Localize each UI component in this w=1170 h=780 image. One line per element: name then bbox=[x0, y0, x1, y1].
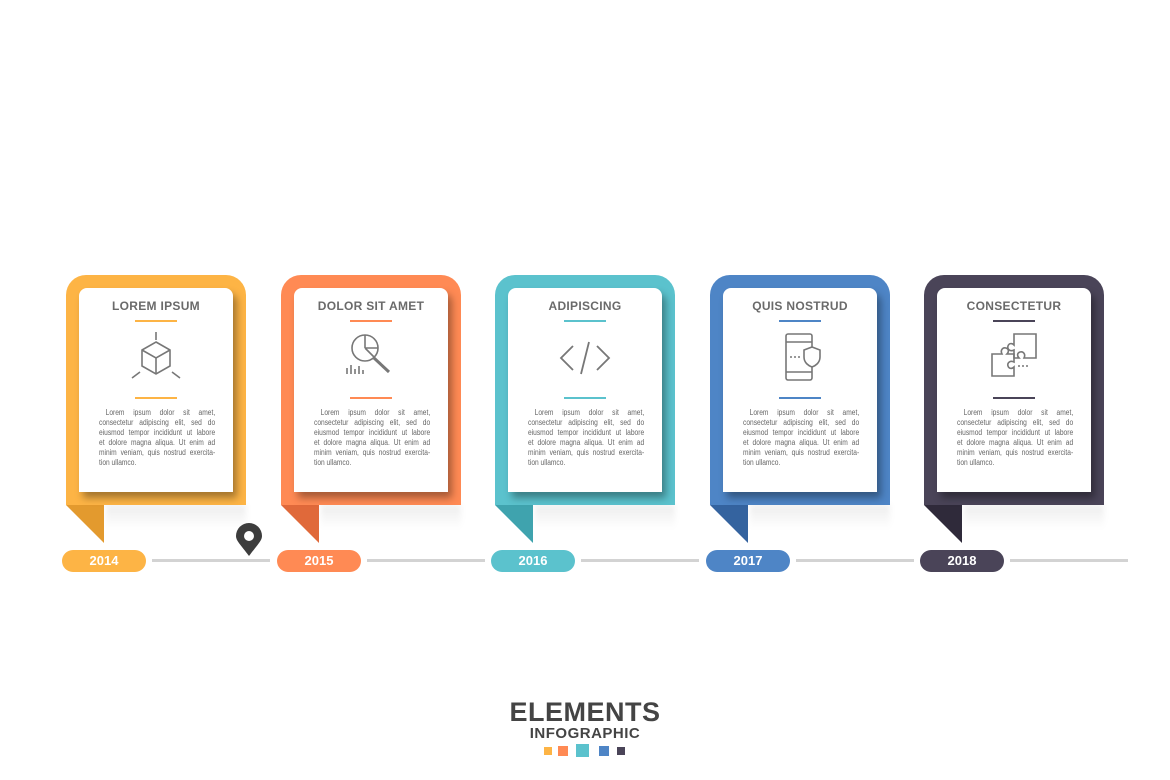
text: consectetur bbox=[99, 418, 133, 427]
text: dolore bbox=[109, 438, 127, 447]
text: minim bbox=[743, 448, 761, 457]
text: adipiscing bbox=[139, 418, 169, 427]
text: et bbox=[957, 438, 963, 447]
text: ipsum bbox=[133, 408, 151, 417]
text: Ut bbox=[394, 438, 400, 447]
text: sit bbox=[1041, 408, 1048, 417]
text: adipiscing bbox=[997, 418, 1027, 427]
text: dolore bbox=[324, 438, 342, 447]
text bbox=[743, 408, 859, 467]
text: ad bbox=[423, 438, 430, 447]
text: elit, bbox=[175, 418, 185, 427]
icon: code bbox=[560, 342, 610, 374]
text: nostrud bbox=[1022, 448, 1044, 457]
text: dolore bbox=[753, 438, 771, 447]
year pills: 2015 bbox=[305, 553, 333, 568]
text: dolor bbox=[589, 408, 603, 417]
text: minim bbox=[99, 448, 117, 457]
text: tion ullamco. bbox=[99, 458, 136, 467]
text: minim bbox=[528, 448, 546, 457]
text: enim bbox=[1047, 438, 1062, 447]
text: ut bbox=[402, 428, 407, 437]
text: incididunt bbox=[798, 428, 826, 437]
text: elit, bbox=[1033, 418, 1043, 427]
text: ut bbox=[1045, 428, 1050, 437]
text bbox=[528, 408, 644, 467]
text: incididunt bbox=[369, 428, 397, 437]
text: adipiscing bbox=[783, 418, 813, 427]
year pills: 2016 bbox=[519, 553, 547, 568]
text: minim bbox=[314, 448, 332, 457]
text: Lorem bbox=[106, 408, 124, 417]
text: labore bbox=[197, 428, 215, 437]
text: enim bbox=[189, 438, 204, 447]
text: consectetur bbox=[743, 418, 777, 427]
text: elit, bbox=[604, 418, 614, 427]
text: Ut bbox=[1037, 438, 1043, 447]
text: nostrud bbox=[808, 448, 830, 457]
text: eiusmod bbox=[99, 428, 124, 437]
text: ipsum bbox=[991, 408, 1009, 417]
text: sed bbox=[191, 418, 202, 427]
text: exercita- bbox=[190, 448, 215, 457]
year pills: 2014 bbox=[90, 553, 118, 568]
title: LOREM IPSUM bbox=[112, 299, 200, 313]
title: ADIPISCING bbox=[548, 299, 622, 313]
text: quis bbox=[363, 448, 375, 457]
icon: puzzle bbox=[991, 333, 1037, 377]
text: Lorem bbox=[321, 408, 339, 417]
text: do bbox=[208, 418, 215, 427]
text: tion ullamco. bbox=[743, 458, 780, 467]
text: Lorem bbox=[964, 408, 982, 417]
text: labore bbox=[412, 428, 430, 437]
text: quis bbox=[148, 448, 160, 457]
text: et bbox=[528, 438, 534, 447]
logo: ELEMENTS bbox=[509, 697, 660, 727]
icon: location pin bbox=[236, 523, 262, 556]
text: et bbox=[99, 438, 105, 447]
text: do bbox=[1066, 418, 1073, 427]
text: incididunt bbox=[1012, 428, 1040, 437]
text: amet, bbox=[414, 408, 430, 417]
text: ipsum bbox=[562, 408, 580, 417]
year pills: 2018 bbox=[948, 553, 976, 568]
logo: INFOGRAPHIC bbox=[530, 725, 640, 742]
card 1: lorem ipsum bbox=[66, 275, 246, 543]
icon: cube bbox=[132, 332, 180, 378]
text: sit bbox=[183, 408, 190, 417]
text: elit, bbox=[819, 418, 829, 427]
text: sit bbox=[398, 408, 405, 417]
text: do bbox=[852, 418, 859, 427]
text: Lorem bbox=[535, 408, 553, 417]
text: et bbox=[314, 438, 320, 447]
text: exercita- bbox=[834, 448, 859, 457]
title: CONSECTETUR bbox=[967, 299, 1061, 313]
text: tion ullamco. bbox=[528, 458, 565, 467]
text: ut bbox=[831, 428, 836, 437]
text: adipiscing bbox=[354, 418, 384, 427]
text: quis bbox=[1006, 448, 1018, 457]
text: Ut bbox=[823, 438, 829, 447]
year pills: 2017 bbox=[734, 553, 762, 568]
text: magna bbox=[989, 438, 1009, 447]
text: exercita- bbox=[619, 448, 644, 457]
text: nostrud bbox=[593, 448, 615, 457]
text: nostrud bbox=[379, 448, 401, 457]
text: quis bbox=[577, 448, 589, 457]
text: ut bbox=[616, 428, 621, 437]
text: ipsum bbox=[348, 408, 366, 417]
text: tempor bbox=[558, 428, 578, 437]
text: do bbox=[423, 418, 430, 427]
text: enim bbox=[833, 438, 848, 447]
text: dolor bbox=[804, 408, 818, 417]
text: aliqua. bbox=[155, 438, 175, 447]
text: sed bbox=[835, 418, 846, 427]
text: aliqua. bbox=[1013, 438, 1033, 447]
text: dolor bbox=[1018, 408, 1032, 417]
text bbox=[957, 408, 1073, 467]
text: veniam, bbox=[550, 448, 573, 457]
text: veniam, bbox=[979, 448, 1002, 457]
text: eiusmod bbox=[743, 428, 768, 437]
text: enim bbox=[404, 438, 419, 447]
text: amet, bbox=[628, 408, 644, 417]
text: tempor bbox=[129, 428, 149, 437]
text: incididunt bbox=[583, 428, 611, 437]
card 4: quis nostrud bbox=[710, 275, 890, 543]
text: exercita- bbox=[405, 448, 430, 457]
title: QUIS NOSTRUD bbox=[752, 299, 848, 313]
text: veniam, bbox=[765, 448, 788, 457]
text bbox=[314, 408, 430, 467]
text: dolore bbox=[967, 438, 985, 447]
text: dolor bbox=[375, 408, 389, 417]
text: adipiscing bbox=[568, 418, 598, 427]
text: aliqua. bbox=[584, 438, 604, 447]
text: sed bbox=[406, 418, 417, 427]
text: dolore bbox=[538, 438, 556, 447]
text: veniam, bbox=[121, 448, 144, 457]
text: quis bbox=[792, 448, 804, 457]
text: amet, bbox=[843, 408, 859, 417]
text: enim bbox=[618, 438, 633, 447]
card 5: consectetur bbox=[924, 275, 1104, 543]
text: minim bbox=[957, 448, 975, 457]
text: ad bbox=[208, 438, 215, 447]
text: et bbox=[743, 438, 749, 447]
text: consectetur bbox=[528, 418, 562, 427]
text: eiusmod bbox=[314, 428, 339, 437]
text: magna bbox=[560, 438, 580, 447]
text: magna bbox=[131, 438, 151, 447]
text: eiusmod bbox=[957, 428, 982, 437]
text: ipsum bbox=[777, 408, 795, 417]
text: nostrud bbox=[164, 448, 186, 457]
text: amet, bbox=[1057, 408, 1073, 417]
card 2: dolor sit amet bbox=[281, 275, 461, 543]
title: DOLOR SIT AMET bbox=[318, 299, 424, 313]
text: consectetur bbox=[314, 418, 348, 427]
year pills bbox=[62, 550, 1004, 572]
text: tempor bbox=[987, 428, 1007, 437]
text: sed bbox=[1049, 418, 1060, 427]
text: incididunt bbox=[154, 428, 182, 437]
text: Lorem bbox=[750, 408, 768, 417]
text: aliqua. bbox=[370, 438, 390, 447]
text: magna bbox=[775, 438, 795, 447]
text: labore bbox=[1055, 428, 1073, 437]
text: dolor bbox=[160, 408, 174, 417]
card 3: adipiscing bbox=[495, 275, 675, 543]
text: tion ullamco. bbox=[314, 458, 351, 467]
text: sed bbox=[620, 418, 631, 427]
text: elit, bbox=[390, 418, 400, 427]
text: do bbox=[637, 418, 644, 427]
text: exercita- bbox=[1048, 448, 1073, 457]
icon: phone shield bbox=[785, 333, 821, 381]
text: aliqua. bbox=[799, 438, 819, 447]
text: magna bbox=[346, 438, 366, 447]
text: veniam, bbox=[336, 448, 359, 457]
text: tempor bbox=[344, 428, 364, 437]
text: consectetur bbox=[957, 418, 991, 427]
text: ad bbox=[852, 438, 859, 447]
text bbox=[99, 408, 215, 467]
text: sit bbox=[827, 408, 834, 417]
text: amet, bbox=[199, 408, 215, 417]
icon: chart magnifier bbox=[346, 334, 390, 374]
text: eiusmod bbox=[528, 428, 553, 437]
text: Ut bbox=[608, 438, 614, 447]
text: sit bbox=[612, 408, 619, 417]
logo bbox=[509, 697, 660, 757]
text: labore bbox=[841, 428, 859, 437]
text: ad bbox=[637, 438, 644, 447]
text: Ut bbox=[179, 438, 185, 447]
text: ad bbox=[1066, 438, 1073, 447]
text: tion ullamco. bbox=[957, 458, 994, 467]
text: labore bbox=[626, 428, 644, 437]
text: ut bbox=[187, 428, 192, 437]
text: tempor bbox=[773, 428, 793, 437]
